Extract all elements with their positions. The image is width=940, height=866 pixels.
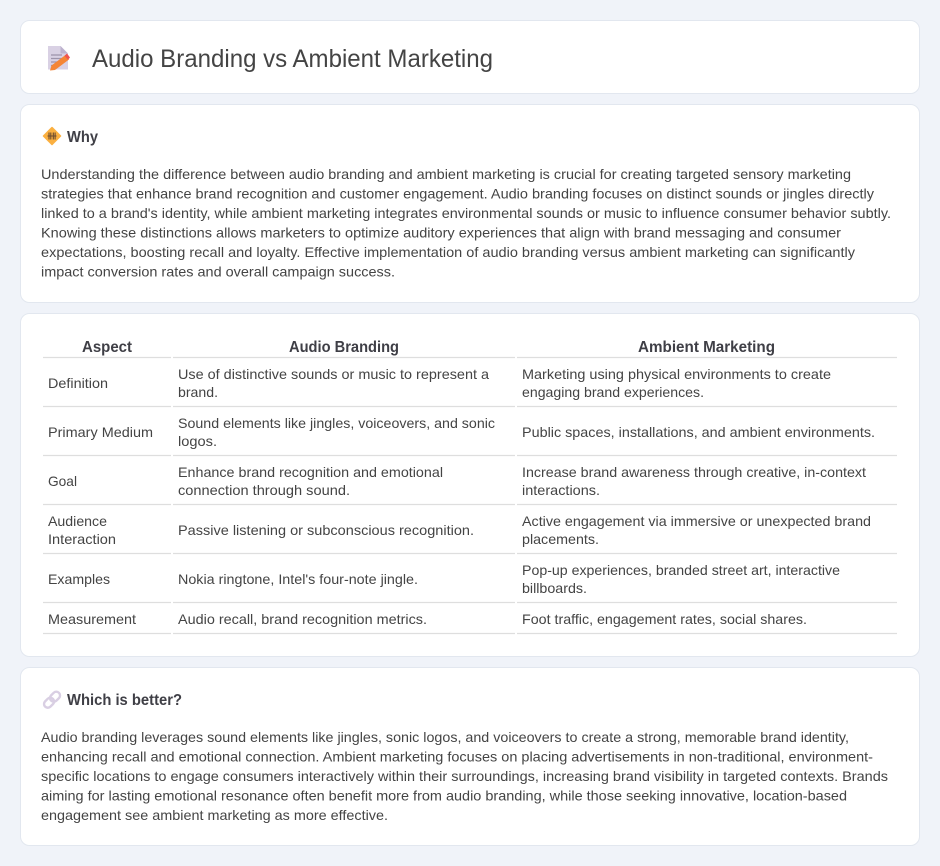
row: definition: brand. [178,384,218,400]
row: audience interaction: Interaction [48,531,116,547]
table header row [82,339,775,356]
icon: document with pencil [48,46,70,70]
row: primary medium: Sound elements like jingles, voiceovers, and sonic [178,415,495,431]
text block: why paragraph: Knowing these distinctions allows marketers to optimize auditory experiences that align with brand messaging and consumer [41,224,841,240]
row: examples [48,562,840,596]
text block: which is better paragraph: enhancing recall and emotional connection. Ambient marketing focuses on placing advertisements in non-traditional, environment- [41,748,873,764]
text block: why paragraph: Understanding the difference between audio branding and ambient marketing is crucial for creating targeted sensory marketing [41,166,851,182]
row: audience interaction: Audience [48,513,107,529]
row: audience interaction [48,513,871,547]
table header row: Aspect [82,339,133,356]
icon: chain link [42,690,62,709]
row: examples: Nokia ringtone, Intel's four-note jingle. [178,571,418,587]
text block: why paragraph: expectations, boosting recall and loyalty. Effective implementation of audio branding versus ambient marketing can significantly [41,244,855,260]
text block: why paragraph: impact conversion rates and overall campaign success. [41,264,395,280]
icon: road sign diamond [44,128,60,144]
row: goal: Goal [48,473,77,489]
table header row: Audio Branding [289,339,399,356]
row: goal: Increase brand awareness through creative, in-context [522,464,866,480]
panel: why [20,104,920,302]
row: audience interaction: Active engagement via immersive or unexpected brand [522,513,871,529]
row: primary medium: Public spaces, installations, and ambient environments. [522,424,875,440]
row: audience interaction: placements. [522,531,599,547]
row: definition: Use of distinctive sounds or music to represent a [178,366,489,382]
row: examples: Examples [48,571,110,587]
row: goal [48,464,866,498]
text block: which is better paragraph [41,729,888,823]
heading: which is better: Which is better? [67,692,182,709]
row: measurement: Foot traffic, engagement rates, social shares. [522,611,807,627]
row: audience interaction: Passive listening or subconscious recognition. [178,522,474,538]
row: definition: Definition [48,375,108,391]
table header row: Ambient Marketing [638,339,775,356]
text block: why paragraph [41,166,891,280]
text block: why paragraph: linked to a brand's identity, while ambient marketing integrates environmental sounds or music to influence consumer behavior subtly. [41,205,891,221]
text block: which is better paragraph: engagement see ambient marketing as more effective. [41,807,388,823]
text block: which is better paragraph: Audio branding leverages sound elements like jingles, sonic logos, and voiceovers to create a strong, memorable brand identity, [41,729,849,745]
row: examples: billboards. [522,580,587,596]
text block: which is better paragraph: aiming for lasting emotional resonance often benefit more from audio branding, while those seeking innovative, location-based [41,788,847,804]
row: primary medium: logos. [178,433,217,449]
title: Audio Branding vs Ambient Marketing [92,45,493,73]
row: examples: Pop-up experiences, branded street art, interactive [522,562,840,578]
panel: which is better [20,668,920,846]
row: measurement: Audio recall, brand recognition metrics. [178,611,427,627]
panel: comparison table [20,314,920,656]
row: definition: engaging brand experiences. [522,384,704,400]
row: measurement [48,611,807,627]
row: measurement: Measurement [48,611,136,627]
row: primary medium [48,415,875,449]
row: goal: Enhance brand recognition and emotional [178,464,443,480]
row: primary medium: Primary Medium [48,424,153,440]
panel: header [20,20,920,94]
row: goal: interactions. [522,482,600,498]
row: definition [48,366,831,400]
row: goal: connection through sound. [178,482,350,498]
text block: why paragraph: strategies that enhance brand recognition and customer engagement. Audio branding focuses on distinct sounds or jingles directly [41,186,874,202]
text block: which is better paragraph: specific locations to engage consumers interactively within their surroundings, increasing brand visibility in targeted contexts. Brands [41,768,888,784]
row: definition: Marketing using physical environments to create [522,366,831,382]
heading: why: Why [67,129,98,146]
